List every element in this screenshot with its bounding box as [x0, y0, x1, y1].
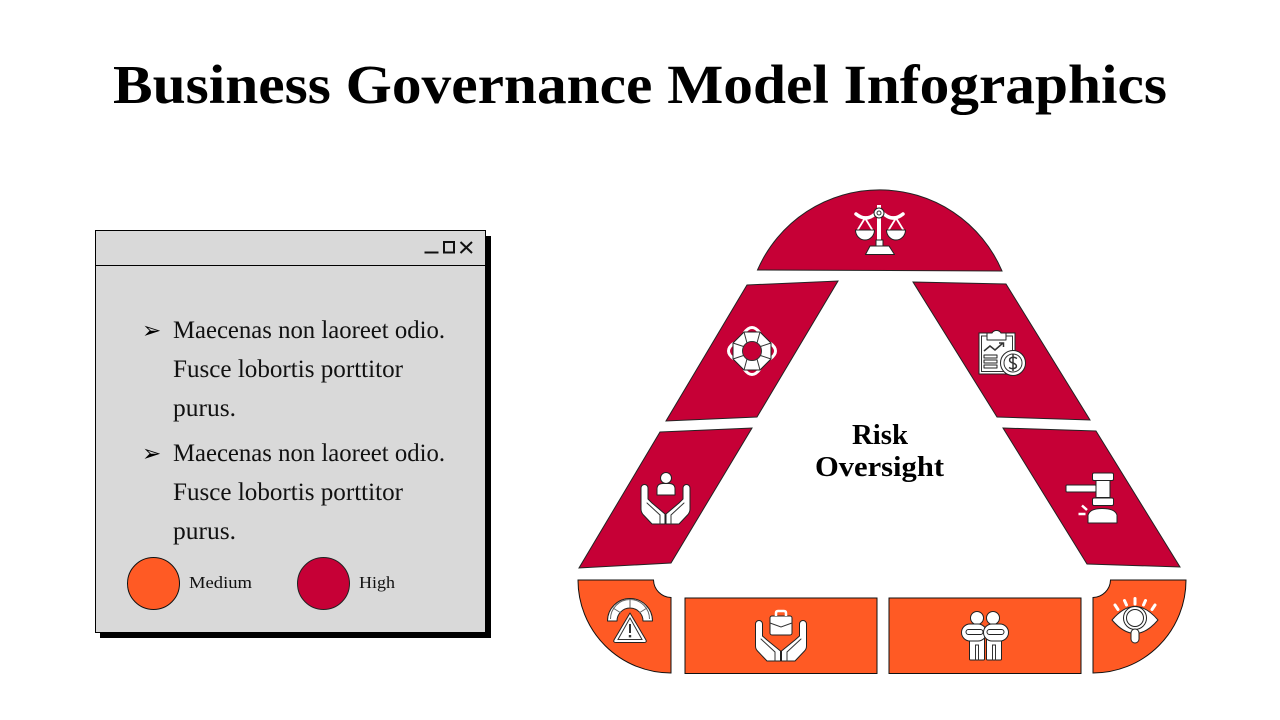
legend: high	[298, 558, 396, 610]
bullet text two: purus.	[173, 518, 236, 545]
legend: medium	[128, 558, 252, 610]
icon: lifebuoy	[728, 328, 776, 374]
segment: lower right with gavel	[1003, 428, 1180, 567]
icon: clipboard and coin	[979, 330, 1026, 376]
bullet text one: Fusce lobortis porttitor	[173, 356, 404, 383]
bullet text two: Maecenas non laoreet odio.	[173, 440, 445, 467]
segment: top arc with scales	[758, 190, 1002, 271]
icon: briefcase in hands	[756, 611, 806, 661]
icon: linked people	[962, 612, 1008, 660]
panel: triangle diagram	[578, 190, 1186, 674]
bullet text two: ➢	[142, 441, 161, 467]
title: Business Governance Model Infographics	[113, 54, 1167, 115]
center label: Risk	[852, 419, 909, 451]
segment: upper right with clipboard	[913, 282, 1090, 420]
segment: bottom rectangle with briefcase	[685, 598, 877, 674]
bullet text one: purus.	[173, 395, 236, 422]
icon: eye with magnifier	[1112, 598, 1158, 643]
title bar	[96, 230, 486, 266]
window shadow	[100, 236, 491, 638]
icon: gauge warning	[608, 598, 652, 642]
panel: window card	[96, 230, 491, 638]
bullet text one: Maecenas non laoreet odio.	[173, 317, 445, 344]
window body	[96, 230, 486, 632]
segment: upper left with lifebuoy	[666, 281, 838, 421]
legend	[128, 558, 396, 610]
bullet list	[142, 317, 445, 545]
icon: person in hands	[641, 472, 690, 524]
window controls	[424, 242, 472, 253]
bullet text two	[142, 440, 445, 545]
icon: scales	[856, 205, 906, 254]
center label: Oversight	[815, 451, 944, 483]
legend: medium: Medium	[189, 573, 252, 592]
segment: lower left with caring hands	[579, 428, 752, 568]
center label	[815, 419, 944, 483]
segment: bottom rectangle with partners	[889, 598, 1081, 674]
segment: bottom left corner with gauge	[578, 580, 671, 673]
bullet text one	[142, 317, 445, 422]
bullet text two: Fusce lobortis porttitor	[173, 479, 404, 506]
bullet text one: ➢	[142, 318, 161, 344]
icon: gavel	[1066, 473, 1117, 523]
legend: high: High	[359, 573, 396, 592]
segment: bottom right corner with eye	[1093, 580, 1186, 673]
